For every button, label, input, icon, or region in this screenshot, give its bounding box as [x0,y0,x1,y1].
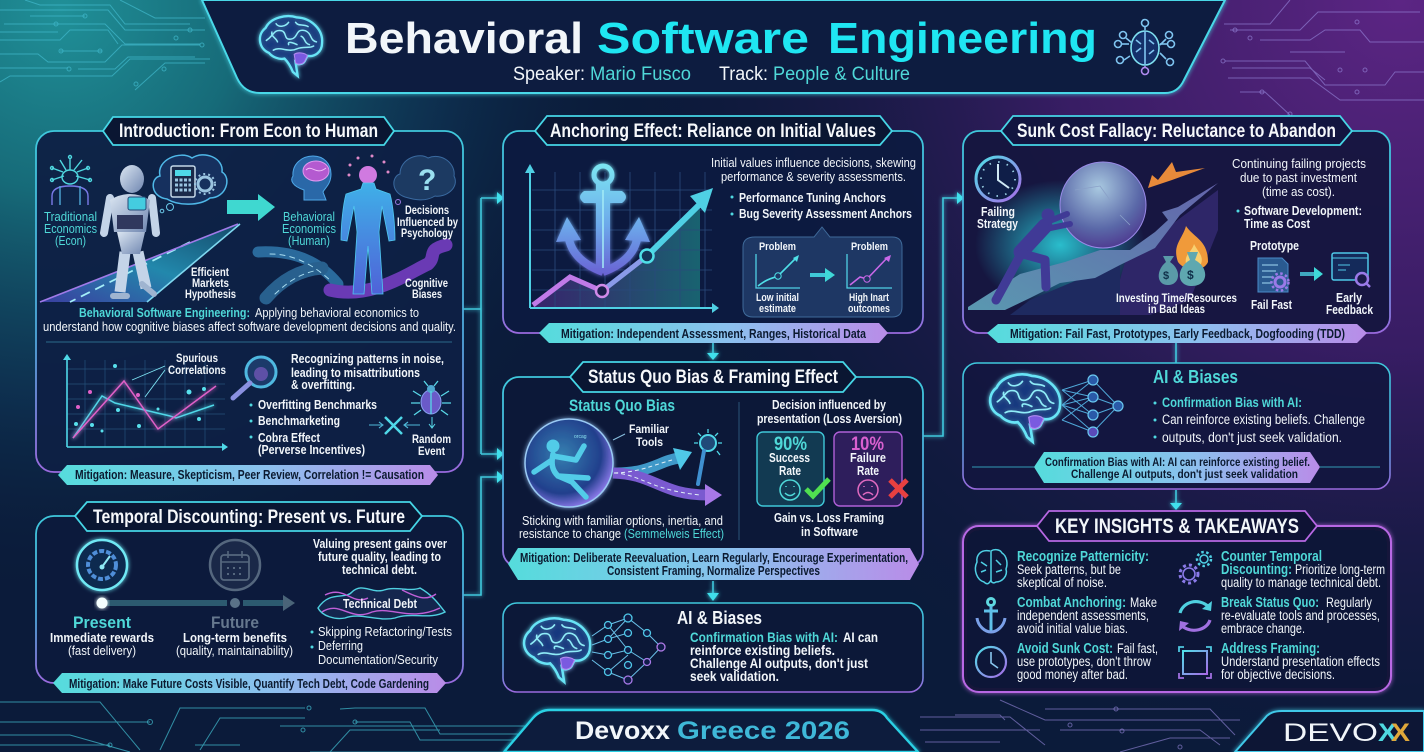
icon: person in bubble [525,419,613,507]
text: anchoring description: Performance Tuning Anchors [739,191,886,205]
text: AI heading and description [677,608,878,684]
icon: brain [975,550,1007,584]
icon: brain [260,16,322,76]
text: AI heading and bullets [1153,367,1365,445]
card: success rate: Success [769,451,810,465]
insight: temporal discounting: Prioritize long-term [1295,562,1385,577]
footer badge: Greece 2026 [677,717,850,745]
heading: Sunk Cost Fallacy: Reluctance to Abandon [1017,121,1336,142]
text: AI heading and description: AI & Biases [677,608,762,628]
text: sunk cost description: (time as cost). [1262,185,1335,199]
insight: patternicity [1017,549,1149,590]
icon: burning money bags: $ [1163,270,1169,282]
text: gain vs loss [774,511,884,539]
list: pattern biases: Benchmarketing [258,414,340,428]
definition text: Behavioral Software Engineering: [79,306,250,320]
mitigation bar: Mitigation: Independent Assessment, Ranges, Historical Data [561,327,867,341]
chart: anchored growth [525,164,719,313]
flow: prototype to feedback: Feedback [1326,303,1373,317]
text: status quo description: resistance to change [519,527,621,541]
heading: Status Quo Bias & Framing Effect [588,367,839,388]
icon: brain network [1114,20,1174,74]
label: investing in bad ideas: Investing Time/Resources [1116,291,1237,305]
chart markers [596,250,654,297]
insight: status quo: embrace change. [1221,621,1305,636]
insight: framing: Address Framing: [1221,641,1320,657]
text: sunk cost description: Software Development: [1244,204,1362,218]
callout: low vs high anchor: Problem [759,241,796,253]
insight: framing [1221,641,1380,682]
insight: sunk cost: use prototypes, don't throw [1017,654,1151,669]
text: present: (fast delivery) [68,644,136,658]
panel: AI and biases (right) [963,363,1390,489]
road: winding cognitive biases [258,245,446,298]
insight: temporal discounting: quality to manage technical debt. [1221,575,1381,590]
title: Engineering [828,14,1097,63]
insight: anchoring: independent assessments, [1017,608,1149,623]
text: sunk cost description: Continuing failing projects [1232,157,1366,171]
label: failing strategy: Failing [981,205,1015,219]
text: framing description: Decision influenced by [772,398,886,412]
callout: low vs high anchor: High Inart [849,292,889,304]
text: framing description [757,398,902,426]
card: success rate: Rate [779,464,801,478]
text: gain vs loss: Gain vs. Loss Framing [774,511,884,525]
insight: temporal discounting: Counter Temporal [1221,549,1322,565]
insight: sunk cost: Fail fast, [1117,641,1158,656]
panel: AI and biases (centre) [503,603,923,692]
chart: spurious correlations: Correlations [168,365,226,377]
panel: temporal discounting [36,502,463,693]
text: present: Present [73,613,131,632]
icon: traditional economist [50,156,92,205]
heading [535,116,892,145]
callout: low vs high anchor: Problem [851,241,888,253]
card: failure rate: Failure [850,451,886,465]
mitigation bar [539,323,888,343]
arrow: econ to human [227,194,275,221]
heading [570,362,856,392]
insight: status quo: Regularly [1326,595,1372,610]
text: framing description: presentation (Loss Aversion) [757,412,902,426]
illustration: sisyphus [968,162,1218,315]
heading: Anchoring Effect: Reliance on Initial Values [550,121,876,142]
text: future: (quality, maintainability) [176,644,293,658]
list: pattern biases: Cobra Effect [258,431,321,445]
subheading: Status Quo Bias [569,397,675,415]
chart: spurious correlations: Spurious [176,353,218,365]
mitigation bar [53,673,446,693]
mitigation bar [1034,452,1320,483]
icon: clock [976,647,1006,677]
label: investing in bad ideas [1116,291,1237,316]
insight: temporal discounting: Discounting: [1221,562,1292,578]
labels: illustration captions: Efficient [191,267,229,279]
labels: illustration captions: (Human) [288,234,330,248]
logo: devoxx [1235,711,1424,752]
text: status quo description: Sticking with familiar options, inertia, and [522,514,723,528]
heading [103,117,394,145]
insight: sunk cost: good money after bad. [1017,667,1128,682]
insight: framing: for objective decisions. [1221,667,1335,682]
icon: human figure [341,154,395,294]
callout: low vs high anchor: estimate [759,303,796,315]
icon: future calendar [210,540,260,590]
text: anchoring description: Bug Severity Assessment Anchors [739,207,912,221]
text: valuing present gains: Valuing present gains over [313,537,447,551]
panel: key insights [963,511,1391,692]
mitigation bar [58,465,438,485]
logo: devoxx: X [1378,719,1397,747]
labels: illustration captions: Markets [192,278,229,290]
speaker and track: Speaker: [513,64,585,85]
list: pattern biases [250,398,377,457]
text: valuing present gains [313,537,447,577]
insight: status quo: Break Status Quo: [1221,595,1319,611]
insight: patternicity: Seek patterns, but be [1017,562,1121,577]
heading: Introduction: From Econ to Human [119,121,378,142]
text: sunk cost description [1232,157,1366,231]
text: anchoring description [711,156,916,221]
icon: present gauge [77,540,127,590]
insight: patternicity: skeptical of noise. [1017,575,1107,590]
speaker and track: Mario Fusco [590,64,691,85]
insight: anchoring: avoid initial value bias. [1017,621,1128,636]
icon: burning money bags: $ [1187,268,1194,282]
card: failure rate: 10% [851,434,884,455]
text: AI heading and bullets: outputs, don't just seek validation. [1162,430,1342,445]
heading [1001,116,1352,145]
insight: anchoring: Make [1130,595,1157,610]
text: valuing present gains: future quality, leading to [318,550,441,564]
text: sunk cost description: due to past investment [1240,171,1357,185]
mitigation bar [987,324,1367,343]
thought bubble: calculator and gear [153,155,227,213]
callout: low vs high anchor [743,227,902,317]
card: success rate [757,432,829,506]
text: future: Long-term benefits [183,631,287,645]
thought bubble: question mark [394,156,455,204]
list: debt causes: Documentation/Security [318,653,439,667]
text: patterns in noise: leading to misattributions [291,366,420,380]
callout: low vs high anchor: Low initial [756,292,799,304]
labels: illustration captions: Behavioral [283,210,335,224]
insight: anchoring [1017,595,1157,636]
icon: anchor [977,598,1005,632]
icon: bug and random event: Random [412,434,451,446]
card: failure rate: Rate [857,464,879,478]
icon: clock [976,157,1020,201]
icon: brain with network [524,614,665,684]
labels: illustration captions: Biases [412,289,442,301]
insight: patternicity: Recognize Patternicity: [1017,549,1149,565]
insight: framing: Understand presentation effects [1221,654,1380,669]
speaker and track: People & Culture [773,64,910,85]
icon: human head with brain [292,156,331,200]
mitigation bar: Mitigation: Make Future Costs Visible, Quantify Tech Debt, Code Gardening [69,677,429,691]
text: AI heading and description: Confirmation Bias with AI: [690,630,838,645]
text: patterns in noise: & overfitting. [291,378,355,392]
icon: technical debt tangle [318,588,445,619]
insight: anchoring: Combat Anchoring: [1017,595,1126,611]
label: familiar tools: Familiar [629,422,669,436]
mitigation bar [508,548,919,580]
label: familiar tools: Tools [636,435,663,449]
header banner [202,0,1225,93]
panel: status quo and framing [503,362,923,580]
label: investing in bad ideas: in Bad Ideas [1148,302,1205,316]
icon: frame [1179,647,1211,678]
list: pattern biases: Overfitting Benchmarks [258,398,377,412]
icon: burning money bags [1159,226,1208,286]
card: failure rate [834,432,907,506]
logo: devoxx: DEVO [1283,719,1378,747]
icon: robot [104,165,156,296]
icon: brain with network [990,374,1123,442]
title: Behavioral [345,14,583,63]
text: AI heading and description: AI can [843,630,878,645]
labels: illustration captions: Economics [44,222,97,236]
list: debt causes [310,625,452,667]
icon: bug and random event [369,381,451,458]
mitigation bar: Mitigation: Deliberate Reevaluation, Learn Regularly, Encourage Experimentation, [520,551,908,565]
list: debt causes: Deferring [318,639,363,653]
icon: anchor [556,166,650,273]
text: AI heading and description: seek validation. [690,669,779,684]
panel: introduction [36,117,463,485]
insight: temporal discounting [1221,549,1385,590]
flow: prototype to feedback: Prototype [1250,239,1299,253]
text: AI heading and description: reinforce existing beliefs. [690,643,835,658]
label: familiar tools [613,422,669,449]
definition text [43,306,456,334]
definition text: understand how cognitive biases affect software development decisions and quality. [43,320,456,334]
logo: devoxx: X [1391,719,1410,747]
arrows: diverging paths [613,448,722,506]
icon: refresh [1179,601,1212,631]
mitigation bar: Mitigation: Fail Fast, Prototypes, Early Feedback, Dogfooding (TDD) [1010,327,1345,341]
footer badge: Devoxx [575,717,670,745]
heading [1037,511,1317,541]
icon: idea magnifier [694,429,722,484]
road: efficient markets [40,223,240,302]
title: Software [597,14,809,63]
connector arrows [463,192,1182,601]
insight: sunk cost: Avoid Sunk Cost: [1017,641,1113,657]
text: sunk cost description: Time as Cost [1244,217,1311,231]
insight: status quo: re-evaluate tools and processes, [1221,608,1380,623]
text: patterns in noise: Recognizing patterns in noise, [291,352,444,366]
text: anchoring description: Initial values influence decisions, skewing [711,156,916,170]
text: future: Future [211,613,259,632]
heading: KEY INSIGHTS & TAKEAWAYS [1055,515,1299,538]
panel: anchoring effect [503,116,923,343]
flow: prototype to feedback [1250,239,1373,317]
speaker and track: Track: [719,64,768,85]
text: status quo description [519,514,724,541]
labels: illustration captions: Influenced by [397,217,458,229]
labels: illustration captions [44,205,458,301]
text: AI heading and bullets: Can reinforce existing beliefs. Challenge [1162,412,1365,427]
speaker and track [513,64,910,85]
text: present: Immediate rewards [50,631,154,645]
card: success rate: 90% [774,434,807,455]
heading [75,502,422,531]
callout: low vs high anchor: outcomes [848,303,890,315]
icon: person in bubble: orcag [574,434,587,440]
text: future [176,613,293,658]
labels: illustration captions: Traditional [44,210,97,224]
list: debt causes: Skipping Refactoring/Tests [318,625,452,639]
footer badge [504,710,918,752]
list: pattern biases: (Perverse Incentives) [258,443,365,457]
text: AI heading and description: Challenge AI outputs, don't just [690,656,868,671]
mitigation bar: Challenge AI outputs, don't just seek validation [1071,467,1298,481]
mitigation bar: Confirmation Bias with AI: AI can reinforce existing belief. [1045,455,1310,469]
flow: prototype to feedback: Fail Fast [1251,298,1293,312]
label: failing strategy: Strategy [977,217,1018,231]
text: valuing present gains: technical debt. [342,563,417,577]
icon: bug and random event: Event [418,446,445,458]
definition text: Applying behavioral economics to [255,306,419,320]
labels: illustration captions: (Econ) [55,234,86,248]
text: AI heading and bullets: Confirmation Bias with AI: [1162,395,1302,410]
insight: status quo [1221,595,1380,636]
labels: illustration captions: Decisions [405,205,449,217]
text: anchoring description: performance & severity assessments. [721,170,906,184]
labels: illustration captions: Cognitive [405,278,448,290]
heading: Temporal Discounting: Present vs. Future [93,507,405,528]
text: present [50,613,154,658]
icon: magnifier [233,357,276,398]
labels: illustration captions: Hypothesis [185,289,236,301]
labels: illustration captions: Economics [282,222,336,236]
chart: spurious correlations [63,353,228,451]
text: AI heading and bullets: AI & Biases [1153,367,1238,387]
mitigation bar: Consistent Framing, Normalize Perspectives [607,564,820,578]
flow: prototype to feedback: Early [1336,291,1362,305]
label: failing strategy [977,205,1018,231]
mitigation bar: Mitigation: Measure, Skepticism, Peer Review, Correlation != Causation [75,468,424,482]
text: patterns in noise [291,352,444,392]
icon: technical debt tangle: Technical Debt [343,597,418,611]
timeline [48,595,295,611]
insight: sunk cost [1017,641,1158,682]
labels: illustration captions: Psychology [401,228,453,240]
title [345,14,1097,63]
text: status quo description: (Semmelweis Effect) [624,527,724,541]
icon: gears [1180,552,1211,583]
thought bubble: question mark: ? [418,164,436,197]
panel: sunk cost fallacy [963,116,1390,343]
text: gain vs loss: in Software [801,525,858,539]
